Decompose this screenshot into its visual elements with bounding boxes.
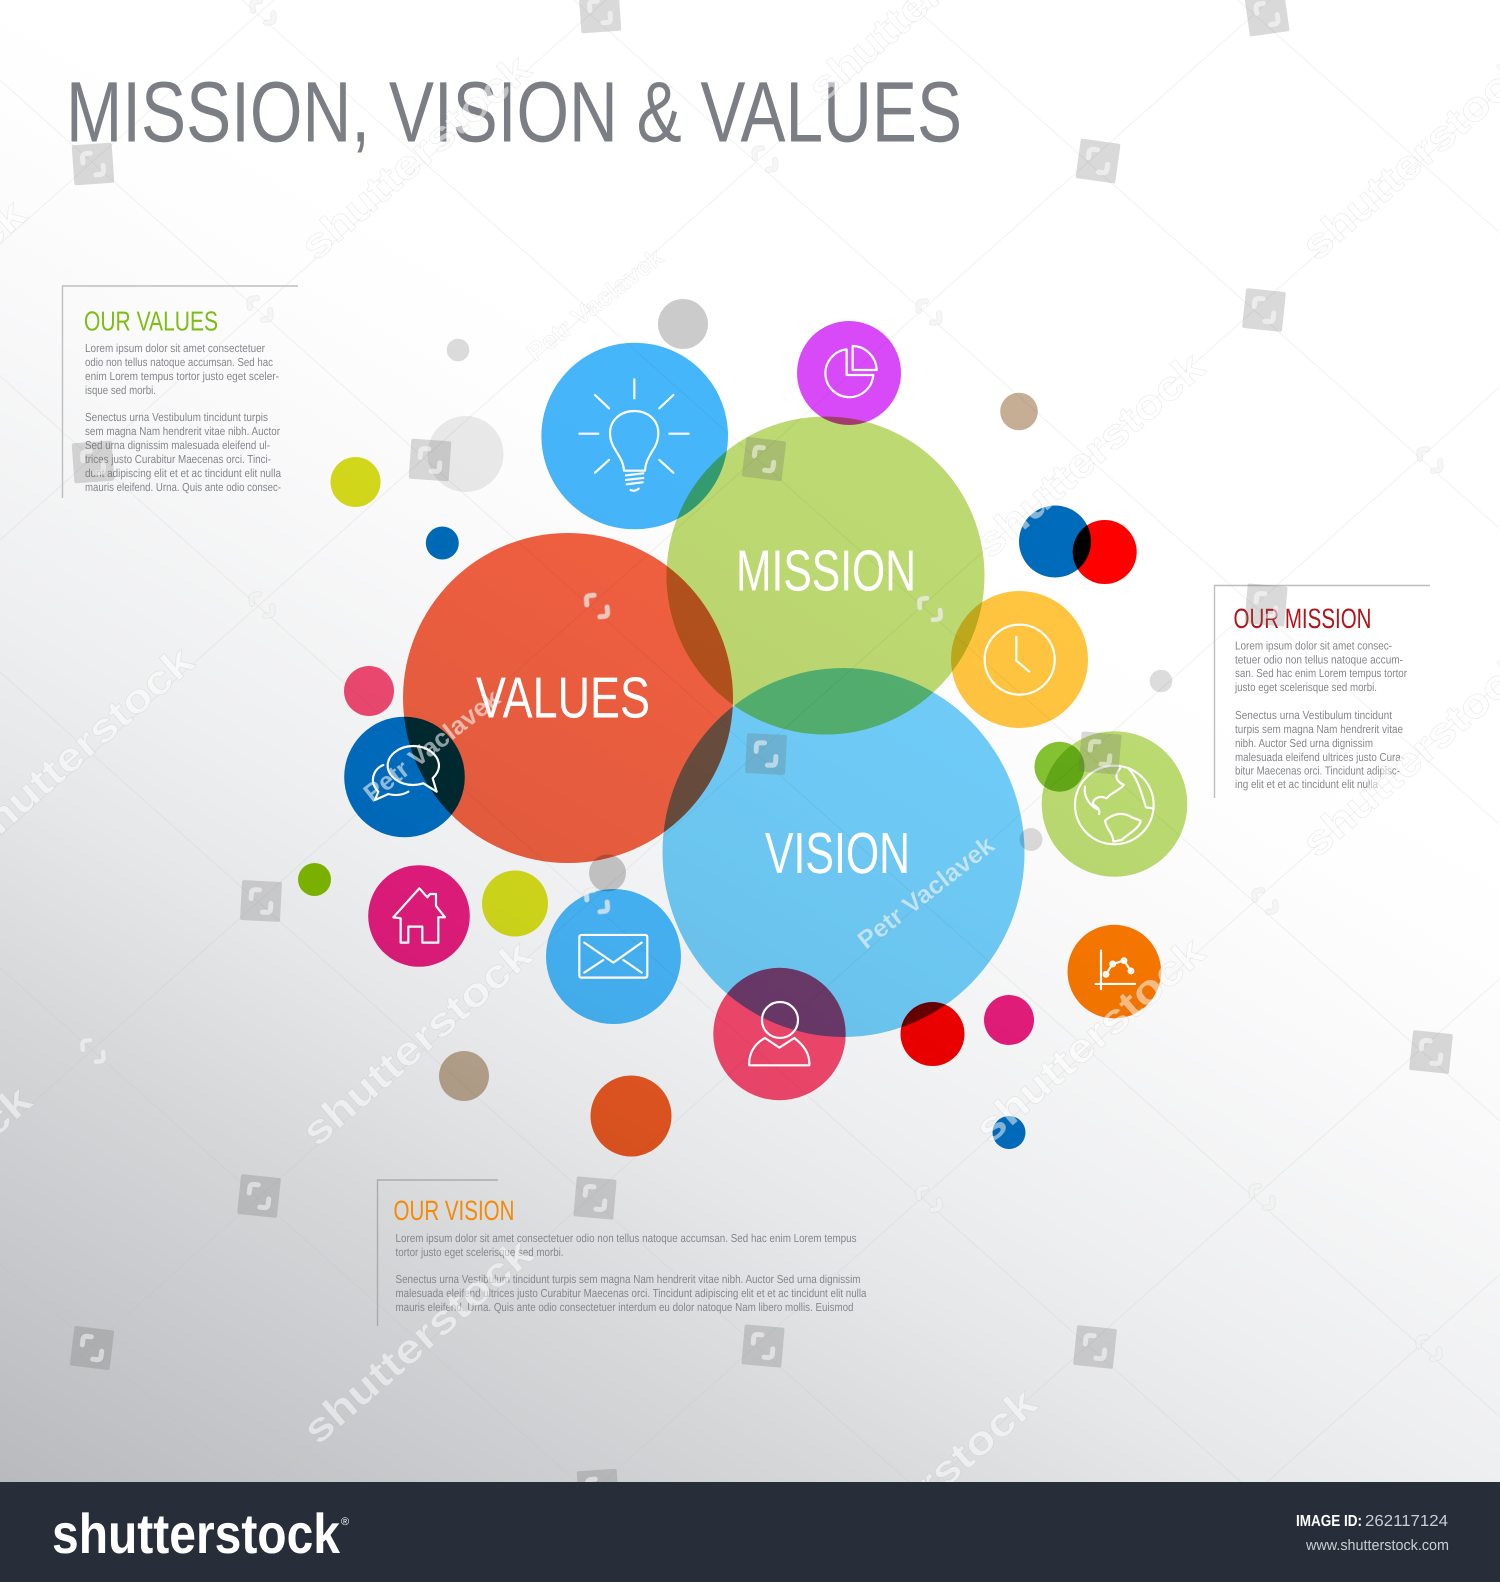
text block: mission copy: nibh. Auctor Sed urna dignissim (1235, 737, 1373, 750)
footer url: www.shutterstock.com (1305, 1537, 1449, 1554)
footer bar (0, 1482, 1500, 1582)
decorative bubbles (298, 299, 1172, 1156)
text block: mission copy: turpis sem magna Nam hendrerit vitae (1235, 723, 1403, 736)
text block: mission copy: malesuada eleifend ultrices justo Cura- (1235, 751, 1404, 764)
icon bubble: envelope (546, 889, 681, 1024)
watermark: shutterstock text: shutterstock (294, 1229, 541, 1453)
watermark: author credit: Petr Vaclavek (521, 243, 669, 367)
text block: mission copy: Lorem ipsum dolor sit amet consec- (1235, 640, 1392, 652)
text block: values copy: mauris eleifend. Urna. Quis ante odio consec- (85, 481, 281, 494)
heading: our mission: OUR MISSION (1234, 603, 1372, 634)
text block: values copy: Sed urna dignissim malesuada eleifend ul- (85, 439, 270, 452)
icon bubble: home (368, 865, 470, 967)
watermark: shutterstock text: shutterstock (292, 45, 539, 269)
text block: mission copy (1234, 640, 1407, 791)
text block: values copy (85, 342, 281, 494)
heading: our vision: OUR VISION (394, 1195, 514, 1226)
panel: our mission (1214, 586, 1430, 798)
icon bubble: person (713, 968, 846, 1100)
text block: mission copy: justo eget scelerisque sed morbi. (1234, 681, 1377, 694)
watermark: author credit: Petr Vaclavek (358, 684, 506, 808)
watermark: shutterstock text: shutterstock (966, 928, 1213, 1152)
text block: vision copy: tortor justo eget scelerisque sed morbi. (396, 1246, 564, 1259)
label: values: VALUES (476, 666, 650, 730)
text block: vision copy: mauris eleifend. Urna. Quis ante odio consectetuer interdum eu dolor natoque Nam libero mollis. Euismod (396, 1301, 854, 1314)
label: mission: MISSION (736, 538, 916, 604)
icon bubble: clock (951, 591, 1088, 728)
text block: values copy: odio non tellus natoque accumsan. Sed hac (85, 356, 273, 369)
text block: vision copy: Lorem ipsum dolor sit amet consectetuer odio non tellus natoque accumsan. Sed hac enim Lorem tempus (396, 1232, 857, 1245)
text block: vision copy: Senectus urna Vestibulum tincidunt turpis sem magna Nam hendrerit vitae nibh. Auctor Sed urna dignissim (396, 1273, 860, 1286)
footer registered mark: ® (341, 1516, 349, 1528)
footer logo: shutterstock (52, 1502, 341, 1565)
watermark: shutterstock text: shutterstock (293, 931, 540, 1155)
text block: values copy: enim Lorem tempus tortor justo eget sceler- (85, 370, 279, 383)
panel: our values (62, 286, 298, 498)
text block: vision copy (396, 1232, 867, 1314)
text block: mission copy: san. Sed hac enim Lorem tempus tortor (1235, 667, 1407, 680)
text block: mission copy: tetuer odio non tellus natoque accum- (1235, 654, 1403, 666)
watermark: author credit (358, 243, 1000, 955)
circle: mission (666, 416, 984, 734)
watermark: shutterstock text: shutterstock (966, 343, 1213, 567)
icon bubble: light bulb (541, 343, 728, 529)
footer image id number: 262117124 (1365, 1513, 1448, 1530)
text block: values copy: sem magna Nam hendrerit vitae nibh. Auctor (85, 425, 280, 438)
heading: our values: OUR VALUES (84, 306, 218, 336)
circle: values (403, 533, 733, 863)
text block: values copy: dunt adipiscing elit et et ac tincidunt elit nulla (85, 467, 281, 480)
panel: our vision (378, 1180, 867, 1326)
text block: vision copy: malesuada eleifend ultrices justo Curabitur Maecenas orci. Tincidunt adipiscing elit et et ac tincidunt elit nulla (396, 1287, 867, 1300)
text block: values copy: isque sed morbi. (85, 384, 156, 397)
watermark: author credit: Petr Vaclavek (852, 831, 1000, 955)
icon bubble: speech bubbles (344, 717, 465, 837)
text block: mission copy: bitur Maecenas orci. Tincidunt adipisc- (1235, 764, 1400, 778)
circle: vision (662, 668, 1024, 1037)
footer image id label: IMAGE ID: (1296, 1513, 1362, 1530)
text block: values copy: Lorem ipsum dolor sit amet consectetuer (85, 342, 265, 355)
text block: mission copy: Senectus urna Vestibulum tincidunt (1235, 709, 1393, 722)
label: vision: VISION (765, 821, 910, 886)
text block: mission copy: ing elit et et ac tincidunt elit nulla (1235, 778, 1378, 791)
text block: values copy: Senectus urna Vestibulum tincidunt turpis (85, 411, 268, 424)
text block: values copy: trices justo Curabitur Maecenas orci. Tinci- (85, 453, 271, 466)
icon bubble: pie chart (797, 321, 901, 425)
icon bubble: globe (1034, 731, 1187, 877)
title: MISSION, VISION & VALUES (66, 64, 962, 160)
icon bubble: line chart (1068, 925, 1161, 1018)
